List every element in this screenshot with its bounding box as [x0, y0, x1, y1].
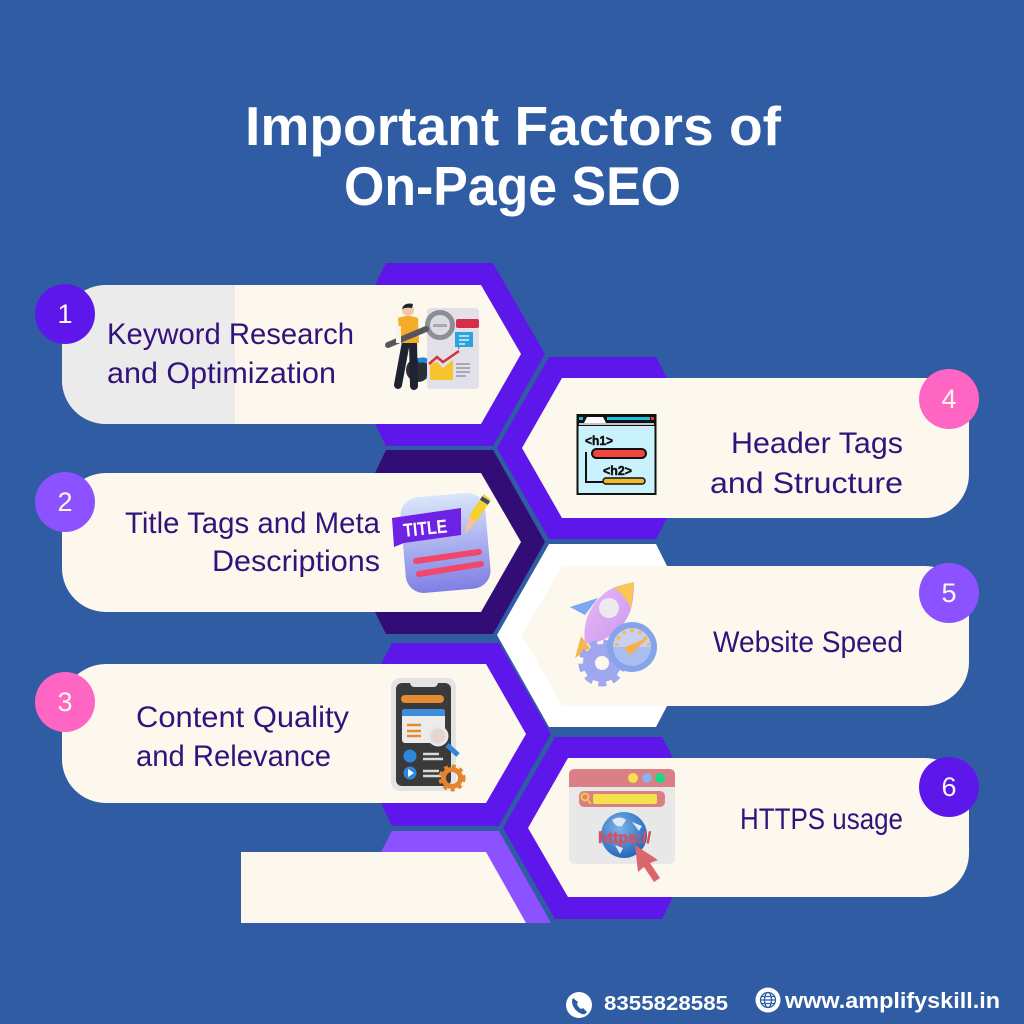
text 2: [125, 507, 380, 578]
card 2: [62, 473, 521, 612]
icon: phone with content: [391, 678, 464, 791]
card 3: [62, 664, 526, 803]
icon: header tags window: [578, 415, 656, 494]
text 5: Website Speed: [713, 626, 903, 659]
icon: header tags window: <h1>: [585, 433, 613, 448]
icon: rocket and gauge: [570, 582, 657, 684]
icon: keyword analyst: [388, 304, 479, 389]
card 1 grey overlay: [62, 285, 235, 424]
icon: phone: [566, 992, 592, 1018]
number badge 2: 2: [57, 487, 73, 517]
title: Important Factors of: [245, 95, 782, 157]
text 3: [136, 701, 349, 773]
panel: 2 title tags: [35, 450, 545, 634]
card 5: [522, 566, 969, 706]
icon: title document: [392, 491, 492, 594]
icon: https browser: [569, 769, 675, 882]
hexagon frame 1: [375, 263, 545, 446]
card 6: [528, 758, 969, 897]
number badge 3: [35, 672, 95, 732]
number badge 1: 1: [57, 299, 73, 329]
icon: globe: [756, 988, 780, 1012]
title: [245, 95, 782, 217]
icon: header tags window: <h2>: [603, 463, 632, 478]
hexagon frame 6: [503, 737, 673, 919]
number badge 4: 4: [941, 384, 957, 414]
icon: https browser: https://: [598, 830, 652, 847]
text 4: and Structure: [710, 467, 903, 500]
number badge 1: [35, 284, 95, 344]
footer: phone: [566, 992, 728, 1018]
hexagon frame 4: [497, 357, 667, 539]
panel: 6 https usage: [503, 737, 979, 919]
number badge 6: [919, 757, 979, 817]
panel: 4 header tags: [497, 357, 979, 539]
hexagon frame 2: [375, 450, 545, 634]
icon: title document: TITLE: [402, 516, 448, 542]
hexagon frame 5: [497, 544, 667, 727]
empty card: [241, 852, 526, 923]
panel: 3 content quality: [35, 643, 551, 826]
number badge 5: [919, 563, 979, 623]
text 1: [107, 318, 354, 390]
number badge 6: 6: [941, 772, 957, 802]
panel: 5 website speed: [497, 544, 979, 727]
text 2: Title Tags and Meta: [125, 507, 380, 540]
number badge 5: 5: [941, 578, 957, 608]
text 1: Keyword Research: [107, 318, 354, 351]
text 3: Content Quality: [136, 701, 349, 734]
phone number: 8355828585: [604, 993, 728, 1015]
card 1: [62, 285, 521, 424]
footer: website: [756, 988, 1000, 1013]
text 4: Header Tags: [731, 427, 903, 460]
text 4: [710, 427, 903, 500]
website url: www.amplifyskill.in: [784, 988, 1000, 1013]
panel: 1 keyword research: [35, 263, 545, 446]
text 6: HTTPS usage: [740, 803, 903, 836]
card 4: [522, 378, 969, 518]
text 3: and Relevance: [136, 740, 331, 773]
number badge 4: [919, 369, 979, 429]
text 1: and Optimization: [107, 357, 336, 390]
hexagon frame 3: [381, 643, 551, 826]
empty frame: [381, 831, 551, 923]
number badge 3: 3: [57, 687, 73, 717]
title: On-Page SEO: [344, 155, 681, 217]
text 2: Descriptions: [212, 545, 380, 578]
panel: bottom-left empty card: [241, 831, 551, 923]
number badge 2: [35, 472, 95, 532]
